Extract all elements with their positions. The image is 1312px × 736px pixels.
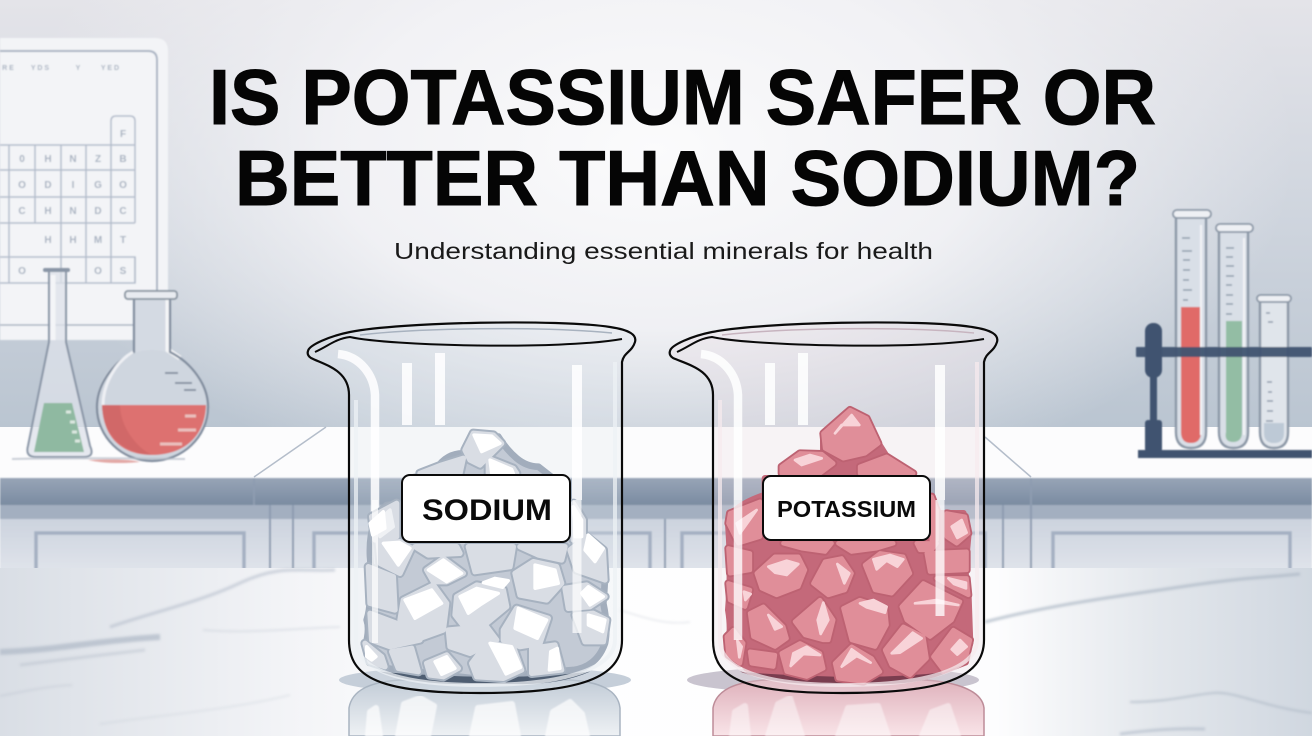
periodic table symbols: R E	[2, 65, 14, 72]
periodic table symbols	[2, 65, 127, 277]
beaker: potassium	[670, 322, 997, 693]
glass body	[670, 322, 997, 693]
beaker outline	[308, 322, 635, 693]
periodic table symbols: Y E D	[101, 65, 119, 72]
glass highlights	[338, 353, 577, 643]
periodic table symbols: N	[69, 154, 77, 165]
periodic table symbols: D	[94, 206, 102, 217]
periodic table symbols: H	[44, 154, 52, 165]
reflection: potassium beaker	[687, 666, 984, 736]
test tube: red	[1173, 210, 1211, 448]
subtitle: Understanding essential minerals for health	[394, 238, 933, 264]
salt crystals	[365, 433, 607, 684]
test tube: clear	[1257, 295, 1291, 448]
periodic table symbols: H	[69, 235, 77, 246]
periodic table symbols: O	[18, 266, 26, 277]
periodic table symbols: B	[119, 154, 127, 165]
periodic table symbols: D	[44, 180, 52, 191]
counter top	[0, 427, 1312, 478]
panel: periodic table poster	[0, 38, 168, 340]
marble veins	[0, 570, 1312, 734]
marble surface	[0, 568, 1312, 736]
title: IS POTASSIUM SAFER OR	[209, 53, 1156, 141]
beaker rim	[315, 337, 622, 352]
glass front highlights	[738, 500, 940, 640]
periodic table symbols: C	[119, 206, 127, 217]
periodic table symbols: F	[120, 129, 126, 140]
glass front highlights	[375, 500, 577, 643]
label: sodium: SODIUM	[422, 494, 552, 527]
potassium crystals	[727, 410, 970, 684]
label: sodium	[402, 475, 570, 542]
reflection: sodium beaker	[339, 666, 631, 736]
counter front and cabinets	[0, 478, 1312, 569]
glass highlights	[701, 353, 940, 500]
periodic table symbols: S	[120, 266, 127, 277]
wall background	[0, 0, 1312, 428]
icon: round flask with red liquid	[12, 291, 208, 463]
periodic table symbols: T	[120, 235, 126, 246]
icon: test tubes in rack	[1136, 210, 1312, 458]
periodic table symbols: N	[69, 206, 77, 217]
title	[209, 53, 1156, 222]
periodic table symbols: 0	[19, 154, 25, 165]
periodic table symbols: O	[94, 266, 102, 277]
periodic table symbols: H	[44, 235, 52, 246]
test tube: green	[1216, 224, 1253, 448]
periodic table symbols: C	[18, 206, 26, 217]
periodic table symbols: O	[18, 180, 26, 191]
glass wall inner sheen	[720, 362, 977, 685]
periodic table symbols: H	[44, 206, 52, 217]
beaker rim	[677, 337, 984, 352]
periodic table symbols: I	[72, 180, 75, 191]
rack	[1136, 323, 1312, 458]
periodic table symbols: Y D S	[31, 65, 49, 72]
glass body	[308, 322, 635, 693]
periodic table symbols: Z	[95, 154, 101, 165]
label: potassium: POTASSIUM	[777, 496, 916, 522]
beaker outline	[670, 322, 997, 693]
periodic table symbols: Y	[76, 65, 81, 72]
beaker: sodium	[308, 322, 635, 693]
periodic table grid	[0, 116, 135, 283]
periodic table symbols: G	[94, 180, 102, 191]
icon: erlenmeyer flask	[27, 270, 92, 457]
periodic table symbols: O	[119, 180, 127, 191]
periodic table symbols: M	[94, 235, 102, 246]
label: potassium	[763, 476, 930, 540]
title: BETTER THAN SODIUM?	[235, 134, 1140, 222]
glass wall inner sheen	[356, 362, 615, 685]
